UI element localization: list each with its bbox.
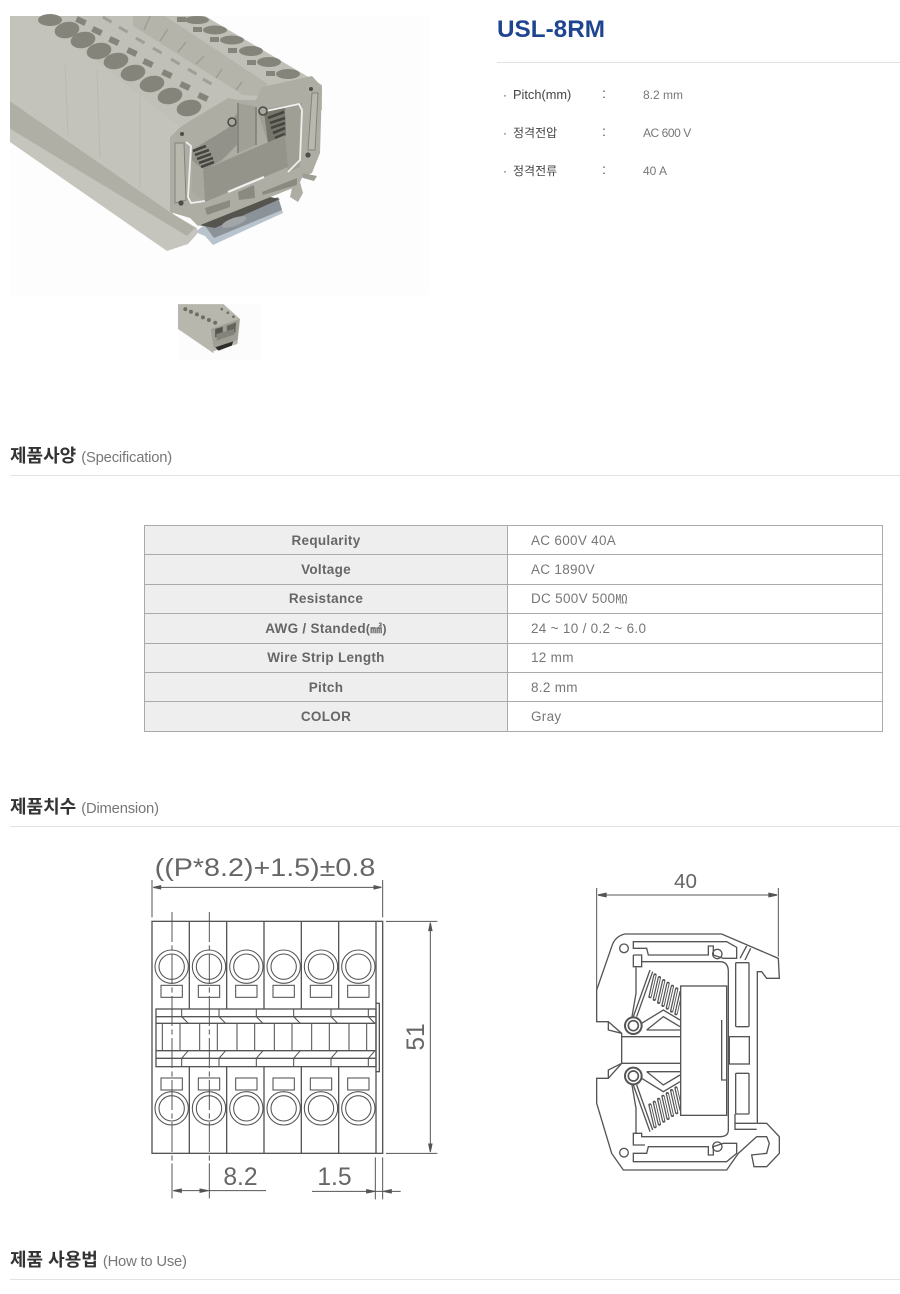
housing inner details [633,942,737,958]
screws [228,107,267,126]
centre web [238,103,256,153]
specification table: Reqularity [291,533,361,548]
spec row: rated voltage: 정격전압 [513,126,557,140]
spec row: pitch [503,85,683,102]
specification table: 24 ~ 10 / 0.2 ~ 6.0 [531,621,646,636]
spec row: rated current: : [602,161,606,177]
spec row: rated voltage: · [503,126,507,140]
upper screw [625,1017,642,1034]
DIN rail metal [195,196,283,245]
front end face [170,76,322,226]
latch and foot [302,173,317,181]
spec row: rated current [503,161,667,178]
specification table: AC 600V 40A [531,533,616,548]
mounting flange [10,101,197,251]
right cavity [257,103,302,172]
specification table: Gray [531,709,561,724]
centre block [681,986,727,1115]
product title: USL-8RM [497,16,605,43]
specification table: AWG / Standed(㎟) [265,621,387,636]
specification table: Pitch [309,680,343,695]
upper wedge [642,1010,680,1030]
height dimension [386,921,437,1153]
specification table: 8.2 mm [531,680,578,695]
hinge band [133,16,268,96]
wire clamps [186,104,302,203]
spec row: rated voltage: : [602,123,606,139]
contact windows [75,16,275,102]
upper spring [633,970,681,1017]
width dimension 40 [597,870,778,990]
lower screw [625,1068,642,1084]
housing outline [597,934,779,1170]
product photo [10,14,322,251]
spec row: pitch: : [602,85,606,101]
front view drawing [152,855,437,1199]
left cavity [192,113,237,170]
specification table: Wire Strip Length [267,650,385,665]
module top surface [40,16,322,127]
width dimension: ((P*8.2)+1.5)±0.8 [155,855,375,882]
spec row: rated current: 정격전류 [513,164,557,178]
specification table: AC 1890V [531,562,595,577]
specification table: 12 mm [531,650,574,665]
spec row: rated current: 40 A [643,164,667,178]
spec row: pitch: · [503,88,507,102]
terminal modules [155,950,375,1125]
width dimension 40: 40 [674,870,697,893]
spec row: pitch: Pitch(mm) [513,87,571,102]
centre lines [172,912,209,1163]
specification table: Voltage [301,562,351,577]
width dimension [152,855,383,917]
side view drawing [597,870,779,1170]
wire holes [38,14,300,118]
height dimension: 51 [403,1023,430,1051]
side channels [175,143,186,203]
lower spring [633,1085,681,1132]
thumbnail photo [178,304,240,354]
specification table: DC 500V 500㏁ [531,591,628,606]
lower wedge [642,1072,680,1092]
spec row: rated current: · [503,164,507,178]
pitch dimension: 8.2 [223,1164,258,1191]
springs [193,112,285,167]
heading: specification: 제품사양 (Specification) [10,442,172,468]
pitch dimension [172,1163,266,1198]
gap dimension [312,1157,401,1199]
heading: dimension: 제품치수 (Dimension) [10,793,159,819]
module side surface [10,16,228,214]
body outline [152,921,383,1153]
heading: how to use: 제품 사용법 (How to Use) [10,1246,187,1272]
specification table: Resistance [289,591,363,606]
gap dimension: 1.5 [317,1164,352,1191]
terminal cover plate [203,135,288,202]
specification table: COLOR [301,709,351,724]
specification table [144,525,883,732]
spec row: pitch: 8.2 mm [643,88,683,102]
base slots [205,178,297,215]
spec row: rated voltage: AC 600 V [643,126,691,140]
spec row: rated voltage [503,123,692,140]
